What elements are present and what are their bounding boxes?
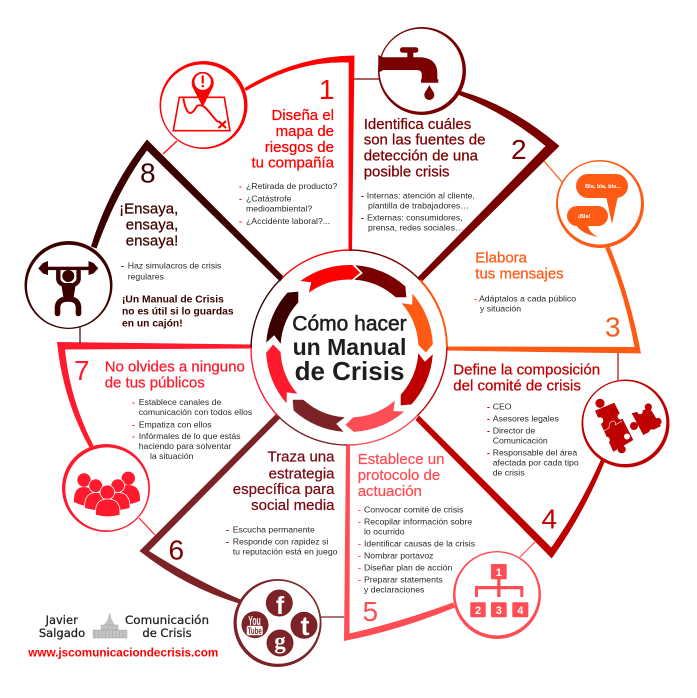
bullets 1: ¿Retirada de producto? [246, 181, 337, 191]
callout: manual in a drawer: no es útil si lo guardas [122, 307, 234, 318]
connector from org chart icon to panel 4 [520, 541, 536, 557]
bullets 5: Recopilar información sobre [364, 517, 472, 527]
brand name [125, 613, 209, 640]
callout: manual in a drawer [122, 295, 234, 330]
bullets 4 [487, 402, 579, 478]
icon: social networks [234, 579, 322, 667]
panel 5: action protocol [344, 444, 541, 641]
bullets 2: - [361, 213, 364, 223]
website url: www.jscomunicaciondecrisis.com [27, 646, 218, 660]
heading 2: son las fuentes de [364, 132, 485, 148]
bullets 7: - [132, 397, 135, 407]
panel 4 outline [416, 416, 605, 558]
panel 8 outline [91, 140, 284, 282]
panel 8: rehearse [24, 140, 284, 343]
heading 1: mapa de [276, 123, 334, 140]
bullets 7: la situación [150, 451, 194, 461]
number 2: 2 [511, 134, 527, 165]
bullets 8: regulares [128, 272, 165, 282]
icon: org chart: 1 [496, 567, 502, 579]
author name [39, 613, 85, 640]
connector from people icon to panel 6 [139, 518, 155, 535]
panel 1: risk map [160, 56, 354, 251]
bullets 4: Comunicación [493, 436, 548, 446]
bullets 7: Infórmales de lo que estás [139, 431, 241, 441]
icon: weightlifter [24, 241, 112, 329]
number 8: 8 [140, 157, 156, 188]
bullets 5: - [358, 563, 361, 573]
bullets 8: - [121, 261, 124, 271]
bullets 4: Responsable del área [493, 448, 577, 458]
panel 6 outline [140, 414, 280, 604]
bullets 4: Asesores legales [493, 414, 560, 424]
bullets 3: - [474, 294, 477, 304]
icon: org chart: 3 [496, 605, 502, 617]
bullets 6: Responde con rapidez si [233, 537, 328, 547]
callout: manual in a drawer: en un cajón! [122, 319, 183, 330]
number 3: 3 [605, 312, 621, 343]
number 5: 5 [362, 596, 378, 627]
icon: social networks: t [300, 611, 310, 641]
bullets 4: - [487, 402, 490, 412]
bullets 1: medioambiental? [246, 204, 312, 214]
panel 2: detection sources [354, 27, 560, 282]
bullets 5: Nombrar portavoz [364, 551, 434, 561]
icon: social networks: Tube [248, 626, 262, 637]
connector from bubbles icon to panel 2 [544, 161, 562, 182]
panel 1 outline [244, 56, 354, 251]
connector from puzzle icon to panel 3 [617, 353, 619, 380]
central thin ring [251, 250, 447, 445]
connector from tap icon to panel 1 [354, 78, 379, 80]
heading 3: tus mensajes [475, 266, 564, 283]
bullets 3 [474, 294, 576, 314]
bullets 2: prensa, redes sociales… [368, 223, 464, 233]
heading 5: actuación [358, 483, 422, 500]
title: Cómo hacer [292, 313, 407, 336]
panel 2 outline [418, 91, 560, 282]
bullets 1: ¿Catástrofe [246, 194, 292, 204]
bullets 5: - [358, 505, 361, 515]
heading 7: No olvides a ninguno [105, 359, 245, 376]
heading 2 [364, 116, 485, 181]
icon: org chart: 2 [475, 605, 481, 617]
icon: speech bubbles: ¡Bla! [578, 214, 591, 220]
bullets 2 [361, 191, 475, 233]
bullets 4: CEO [493, 402, 512, 412]
heading 6: social media [251, 497, 335, 514]
heading 1: tu compañía [251, 154, 335, 172]
bullets 6: tu reputación está en juego [233, 547, 338, 557]
bullets 1: - [239, 194, 242, 204]
panel 7 outline [57, 342, 252, 448]
connector from map icon to panel 8 [163, 141, 177, 154]
bullets 2: - [361, 191, 364, 201]
bullets 5: Identificar causas de la crisis [364, 539, 476, 549]
icon: social networks: g [274, 628, 286, 654]
heading 6: estrategia [269, 465, 335, 482]
bullets 4: - [487, 414, 490, 424]
icon: group of people [62, 444, 150, 532]
heading 1 [251, 107, 335, 172]
heading 8: ensaya, [126, 216, 178, 233]
heading 3 [475, 250, 564, 283]
bullets 7: Empatiza con ellos [139, 419, 212, 429]
bullets 6: - [226, 525, 229, 535]
bullets 4: - [487, 426, 490, 436]
author name: Javier [45, 613, 78, 627]
bullets 7: Establece canales de [139, 397, 221, 407]
callout: manual in a drawer: ¡Un Manual de Crisis [122, 295, 224, 306]
number 1: 1 [319, 74, 334, 105]
bullets 4: Director de [493, 426, 535, 436]
brand name: de Crisis [142, 626, 192, 640]
heading 8: ensaya! [126, 232, 178, 249]
icon: social networks: You [248, 613, 261, 628]
heading 7 [105, 359, 245, 392]
bullets 5: y declaraciones [364, 585, 425, 595]
brand name: Comunicación [125, 613, 209, 627]
panel 7: audiences [57, 342, 253, 535]
bullets 7: - [132, 431, 135, 441]
bullets 2: Externas: consumidores, [367, 213, 463, 223]
bullets 8: Haz simulacros de crisis [128, 261, 222, 271]
heading 5 [358, 451, 444, 500]
heading 4: del comité de crisis [453, 378, 581, 395]
bullets 3: y situación [480, 304, 521, 314]
bullets 5: - [358, 575, 361, 585]
heading 6 [233, 449, 335, 514]
bullets 6: Escucha permanente [233, 525, 315, 535]
heading 2: detección de una [364, 148, 479, 165]
bullets 7 [132, 397, 253, 461]
panel 3 outline [447, 246, 641, 354]
bullets 5: - [358, 551, 361, 561]
heading 6: Traza una [268, 449, 335, 466]
icon: puzzle pieces [582, 380, 670, 468]
connector from social icon to panel 5 [321, 616, 344, 618]
heading 6: específica para [233, 481, 335, 498]
number 6: 6 [168, 534, 184, 565]
bullets 4: - [487, 448, 490, 458]
bullets 5: Diseñar plan de acción [364, 563, 453, 573]
bullets 6 [226, 525, 338, 557]
bullets 1 [239, 181, 337, 226]
panel 6: social media [140, 414, 344, 667]
heading 2: posible crisis [364, 164, 450, 181]
bullets 6: - [226, 537, 229, 547]
author name: Salgado [39, 626, 85, 640]
bullets 5: Preparar statements [364, 575, 443, 585]
bullets 7: - [132, 419, 135, 429]
footer: author and brand [27, 613, 218, 660]
bullets 7: haciendo para solventar [139, 441, 232, 451]
bullets 8 [121, 261, 222, 282]
bullets 2: plantilla de trabajadores… [368, 201, 469, 211]
bullets 4: de crisis [493, 468, 525, 478]
heading 7: de tus públicos [105, 375, 205, 392]
bullets 5: Convocar comité de crisis [364, 505, 464, 515]
central arrow cycle [251, 250, 448, 447]
icon: capitol building [93, 613, 127, 638]
icon: risk map [160, 61, 248, 149]
heading 5: protocolo de [358, 467, 440, 484]
heading 1: riesgos de [265, 139, 334, 156]
heading 5: Establece un [358, 451, 444, 468]
icon: org chart [453, 551, 541, 639]
bullets 5: - [358, 539, 361, 549]
bullets 5 [358, 505, 476, 595]
heading 3: Elabora [475, 250, 528, 267]
bullets 1: - [239, 216, 242, 226]
icon: dripping tap [378, 27, 466, 115]
bullets 1: - [239, 181, 242, 191]
heading 1: Diseña el [271, 107, 334, 124]
bullets 2: Internas: atención al cliente, [367, 191, 475, 201]
heading 8 [119, 200, 178, 249]
title: un Manual [293, 334, 406, 360]
connector from weightlifter icon to panel 7 [79, 327, 81, 343]
icon: org chart: 4 [517, 605, 524, 617]
bullets 3: Adáptalos a cada público [479, 294, 576, 304]
bullets 5: lo ocurrido [364, 527, 405, 537]
icon: social networks: f [276, 592, 285, 620]
bullets 1: ¿Accidente laboral?... [246, 216, 330, 226]
icon: speech bubbles: Bla, bla, bla... [585, 184, 621, 190]
title: de Crisis [295, 356, 404, 386]
number 4: 4 [542, 504, 557, 535]
icon: speech bubbles [556, 160, 644, 248]
heading 4 [453, 361, 600, 395]
bullets 5: - [358, 517, 361, 527]
heading 8: ¡Ensaya, [119, 200, 178, 217]
bullets 4: afectada por cada tipo [493, 458, 579, 468]
number 7: 7 [74, 355, 90, 386]
panel 3: messages [447, 160, 644, 354]
title [292, 313, 407, 386]
heading 4: Define la composición [453, 361, 600, 378]
panel 5 outline [344, 444, 455, 641]
panel 4: crisis committee [416, 353, 670, 558]
heading 2: Identifica cuáles [364, 116, 471, 133]
bullets 7: comunicación con todos ellos [139, 407, 253, 417]
